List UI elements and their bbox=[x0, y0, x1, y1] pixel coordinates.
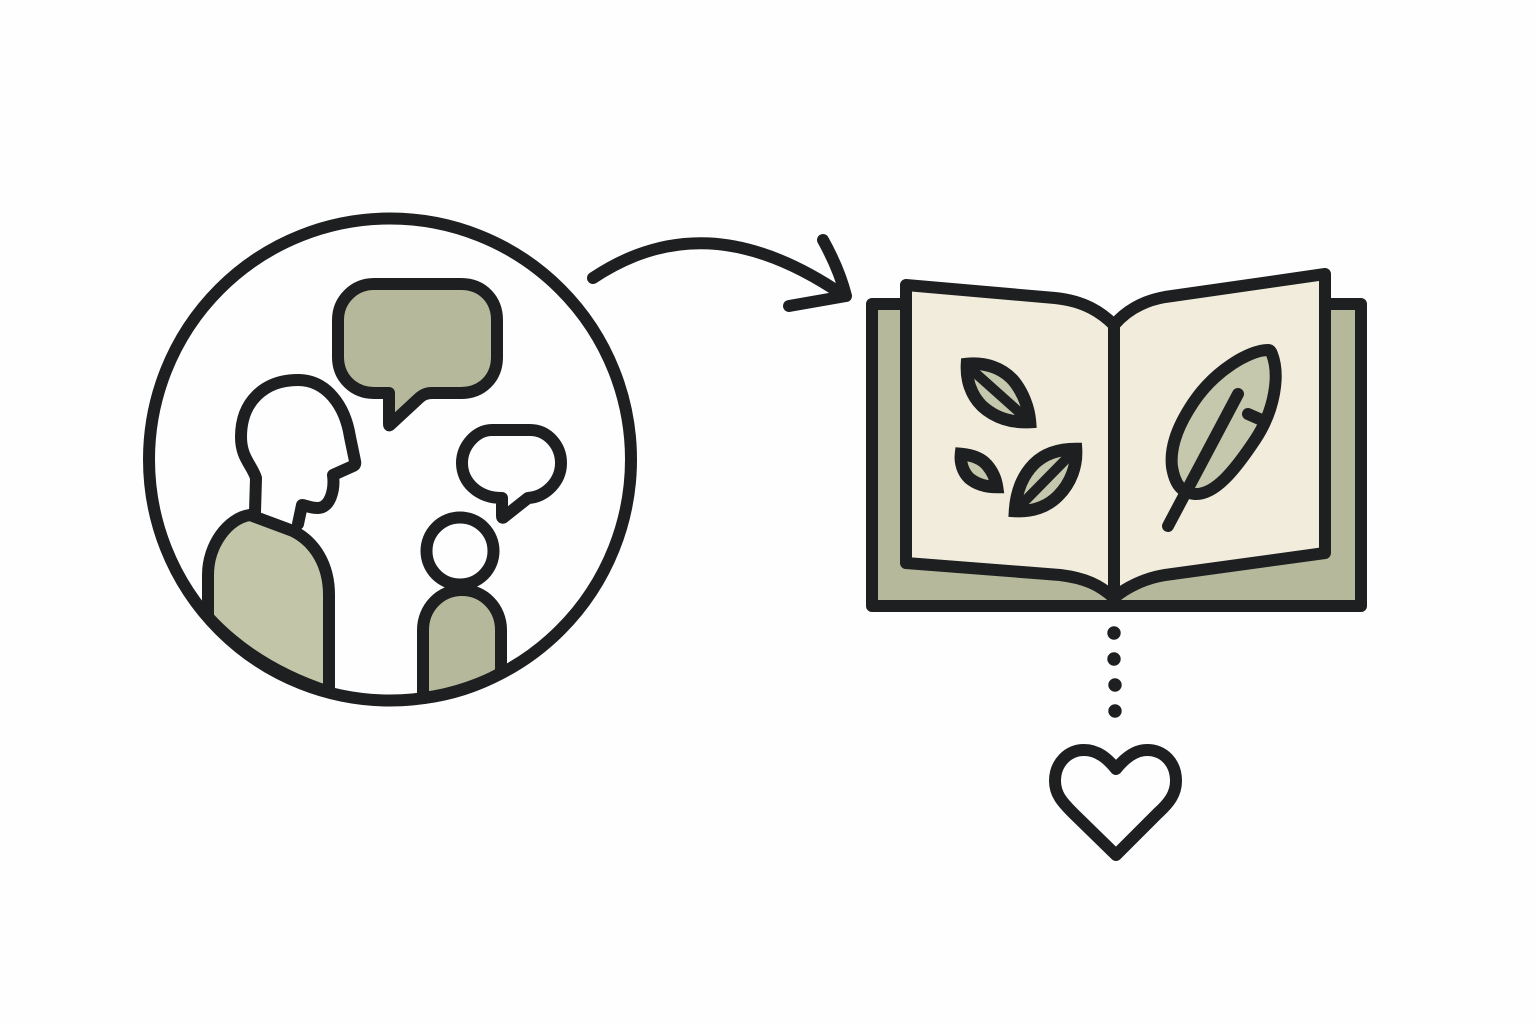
book cover bbox=[872, 304, 1361, 606]
panel: open book bbox=[872, 274, 1361, 606]
icon: small leaf bbox=[961, 454, 997, 487]
arrow: curved arrow to book bbox=[593, 240, 846, 306]
icon: large speech bubble bbox=[338, 284, 497, 425]
icon: middle leaf bbox=[1015, 449, 1076, 511]
icon: child body bbox=[423, 590, 501, 698]
icon: heart bbox=[1055, 750, 1176, 855]
icon: large leaf bbox=[967, 364, 1030, 422]
dotted connector bbox=[1107, 626, 1122, 718]
icon: small speech bubble bbox=[462, 430, 561, 518]
icon: feather bbox=[1168, 350, 1276, 526]
icon: adult body bbox=[208, 515, 329, 692]
icon: child head bbox=[426, 518, 494, 584]
left page bbox=[906, 285, 1114, 598]
circle outline bbox=[149, 218, 631, 700]
right page bbox=[1114, 274, 1325, 598]
icon: adult head bbox=[241, 380, 355, 524]
panel: circle with people in conversation bbox=[149, 218, 631, 700]
